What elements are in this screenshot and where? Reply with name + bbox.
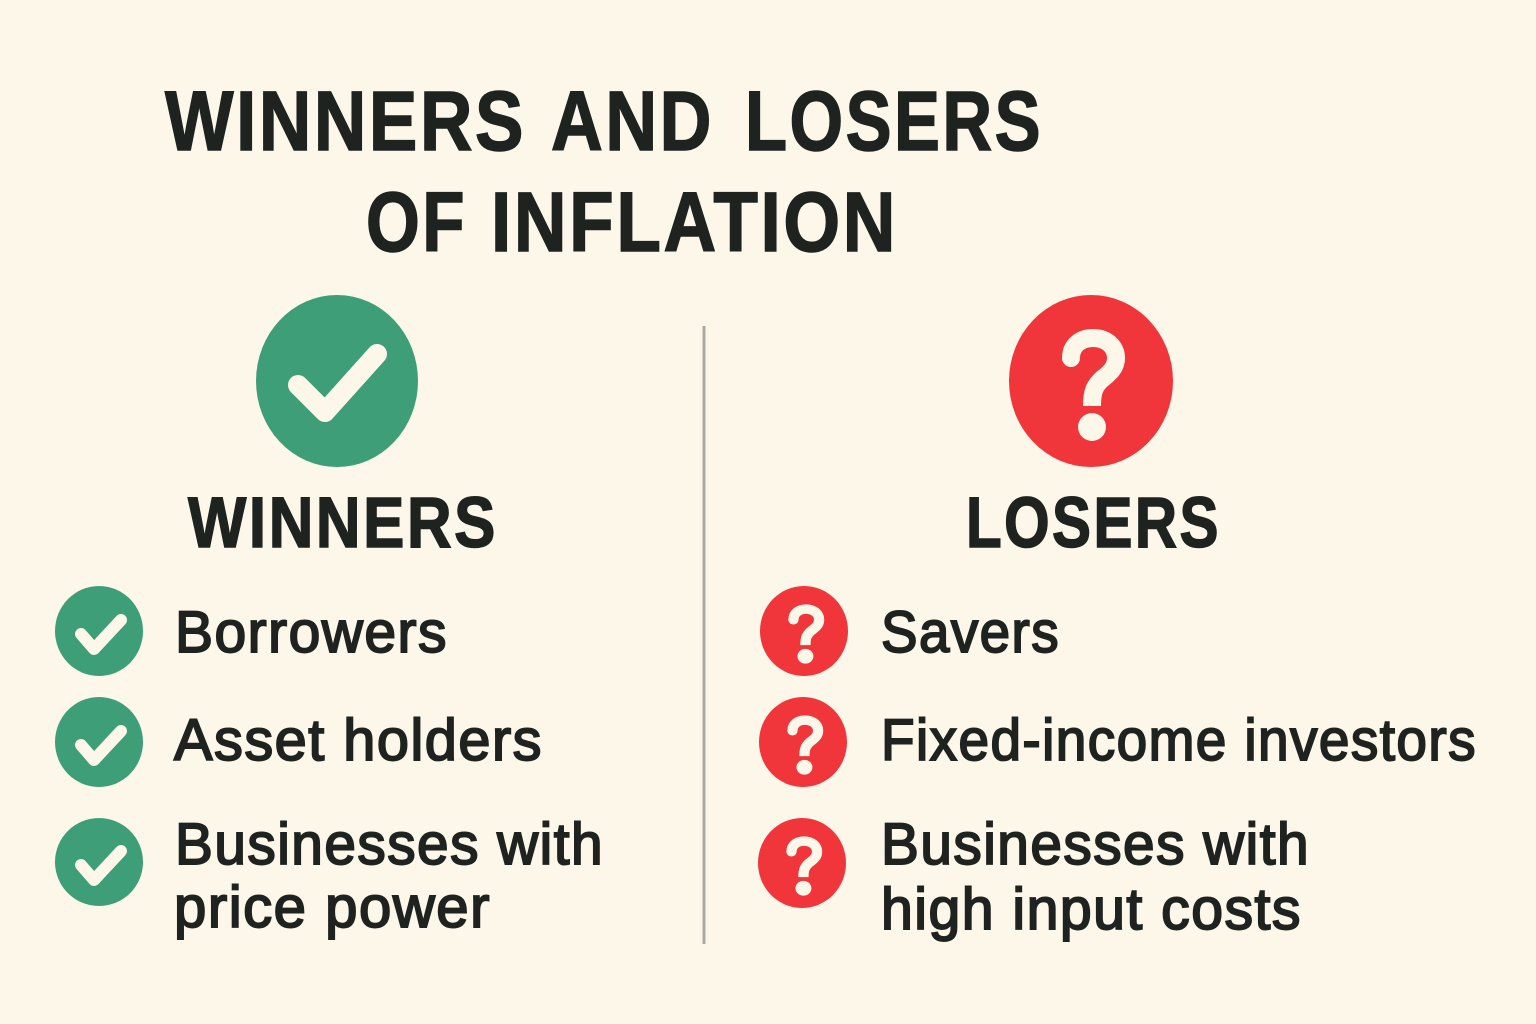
list item: businesses with price power [55, 812, 604, 940]
list item: asset holders: Asset holders [174, 708, 543, 773]
list item: businesses with high input costs: high input costs [881, 877, 1302, 942]
list item: businesses with price power: Businesses with [175, 812, 604, 877]
panel: winners [55, 295, 604, 940]
list item: businesses with high input costs [758, 812, 1310, 942]
list item: businesses with high input costs: Businesses with [881, 812, 1310, 877]
title [165, 74, 1043, 269]
title: WINNERS [165, 74, 526, 168]
panel: losers [758, 295, 1477, 942]
list item: businesses with price power: price power [174, 875, 491, 940]
heading: losers: LOSERS [966, 484, 1221, 563]
icon: large green check [256, 295, 418, 467]
list item: fixed-income investors: Fixed-income investors [881, 708, 1477, 773]
title: LOSERS [745, 74, 1043, 168]
heading: winners: WINNERS [188, 484, 498, 563]
title: INFLATION [491, 175, 898, 269]
list item: savers [760, 586, 1060, 676]
title: OF [366, 175, 467, 269]
list item: fixed-income investors [759, 697, 1477, 787]
list item: asset holders [55, 697, 543, 787]
icon: large red question mark [1009, 295, 1173, 467]
list item: borrowers [55, 586, 448, 676]
list item: borrowers: Borrowers [175, 600, 448, 665]
list item: savers: Savers [881, 600, 1060, 665]
title: AND [551, 74, 714, 168]
